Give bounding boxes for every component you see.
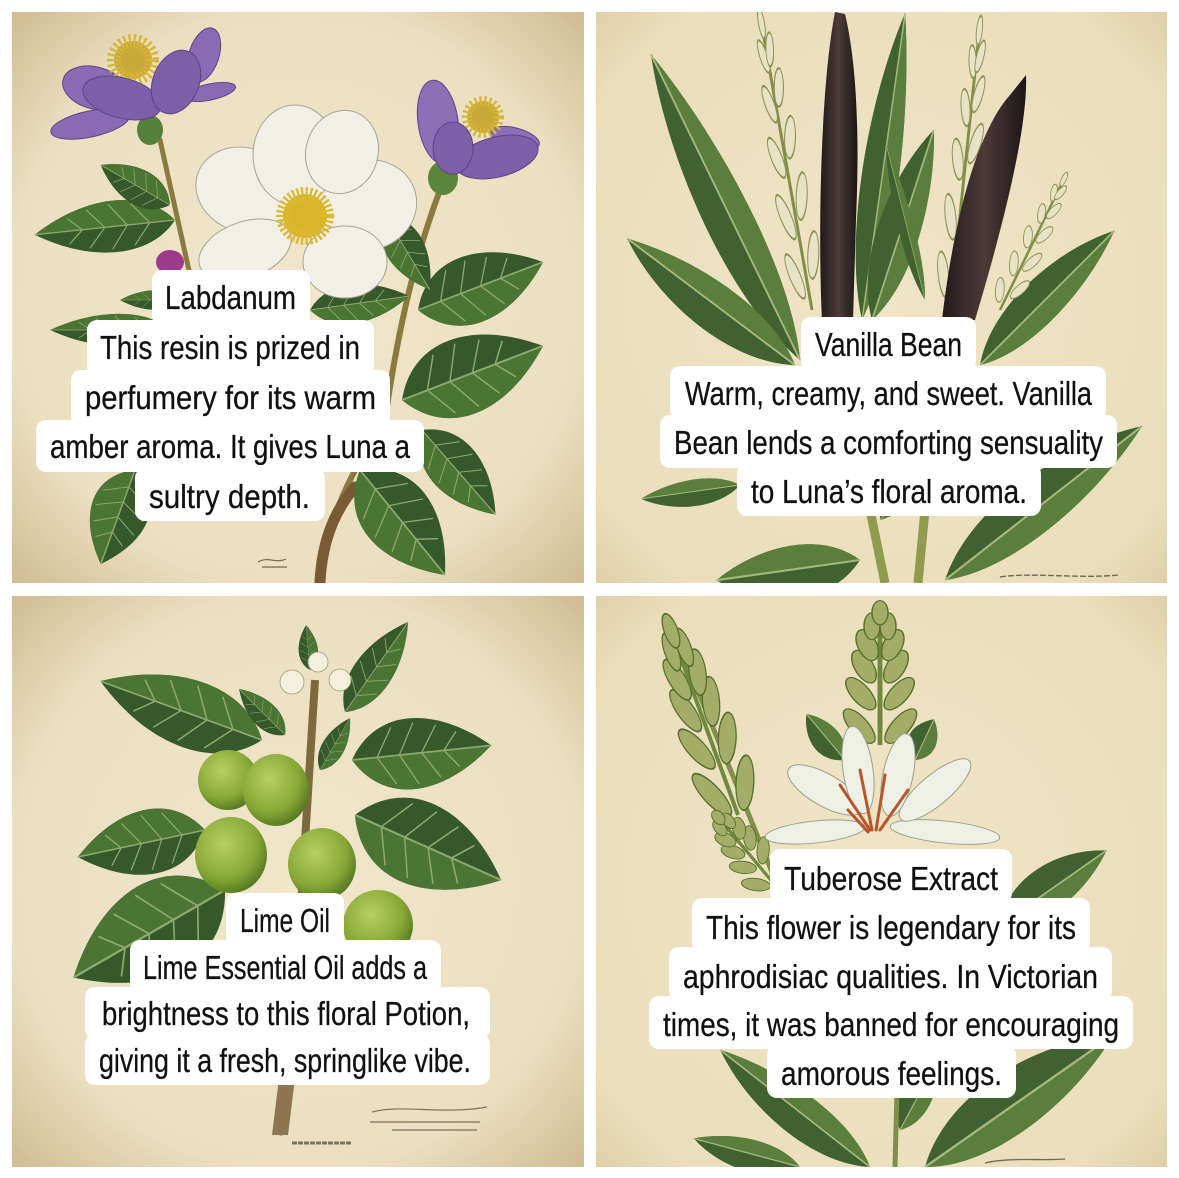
- parchment background: [596, 596, 1167, 1167]
- text block: Labdanum: This resin is prized in: [100, 329, 360, 366]
- text block: Labdanum: [36, 270, 424, 521]
- text block: Tuberose Extract: aphrodisiac qualities. In Victorian: [683, 958, 1098, 995]
- parchment background: [12, 12, 584, 583]
- icon: magenta bud: [156, 250, 184, 270]
- text block: Vanilla Bean: to Luna’s floral aroma.: [751, 473, 1027, 510]
- text block: Labdanum: perfumery for its warm: [85, 379, 376, 416]
- text block: Lime Oil: Lime Essential Oil adds a: [143, 949, 427, 986]
- text block: Tuberose Extract: This flower is legendary for its: [706, 909, 1076, 946]
- signature: [1000, 575, 1118, 577]
- leaves: [32, 150, 557, 597]
- text block: Lime Oil: Lime Oil: [240, 902, 330, 939]
- icon: vanilla pods: [820, 12, 1026, 320]
- icon: white flower spikes: [756, 12, 1068, 310]
- stems: [672, 620, 897, 1167]
- stems: [160, 140, 440, 582]
- parchment background: [596, 12, 1167, 583]
- text block: Lime Oil: giving it a fresh, springlike vibe.: [99, 1042, 471, 1079]
- signature: [258, 559, 287, 567]
- stem: [278, 680, 315, 1135]
- panel: Vanilla Bean: [596, 5, 1167, 609]
- small script caption: [292, 1107, 487, 1143]
- icon: green bud spikes: [662, 600, 938, 892]
- leaves: [689, 830, 1129, 1178]
- text block: Labdanum: amber aroma. It gives Luna a: [50, 428, 411, 465]
- icon: white blossoms: [280, 652, 351, 694]
- text block: Tuberose Extract: amorous feelings.: [781, 1055, 1002, 1092]
- icon: white flower: [184, 102, 427, 298]
- leaves: [611, 10, 1157, 609]
- text block: Vanilla Bean: Warm, creamy, and sweet. Vanilla: [685, 375, 1093, 412]
- icon: purple flower right: [412, 78, 543, 195]
- panel: Lime Oil: [12, 596, 584, 1167]
- trunk: [272, 1085, 294, 1135]
- icon: purple flower left: [48, 24, 237, 145]
- stems: [870, 510, 925, 583]
- text block: Lime Oil: [85, 893, 490, 1085]
- icon: limes: [195, 750, 413, 960]
- text block: Lime Oil: brightness to this floral Potion,: [102, 995, 470, 1032]
- panel: Labdanum: [12, 12, 584, 597]
- text block: Tuberose Extract: Tuberose Extract: [784, 860, 998, 897]
- leaves: [50, 611, 518, 1018]
- text block: Labdanum: Labdanum: [165, 279, 296, 316]
- signature: [985, 1159, 1065, 1163]
- text block: Vanilla Bean: Vanilla Bean: [815, 326, 962, 363]
- text block: Vanilla Bean: [660, 317, 1117, 516]
- parchment background: [12, 596, 584, 1167]
- text block: Vanilla Bean: Bean lends a comforting sensuality: [674, 424, 1103, 461]
- panel: Tuberose Extract: [596, 596, 1167, 1178]
- text block: Labdanum: sultry depth.: [149, 478, 310, 515]
- icon: white tuberose flower: [764, 724, 1001, 849]
- text block: Tuberose Extract: [649, 849, 1133, 1098]
